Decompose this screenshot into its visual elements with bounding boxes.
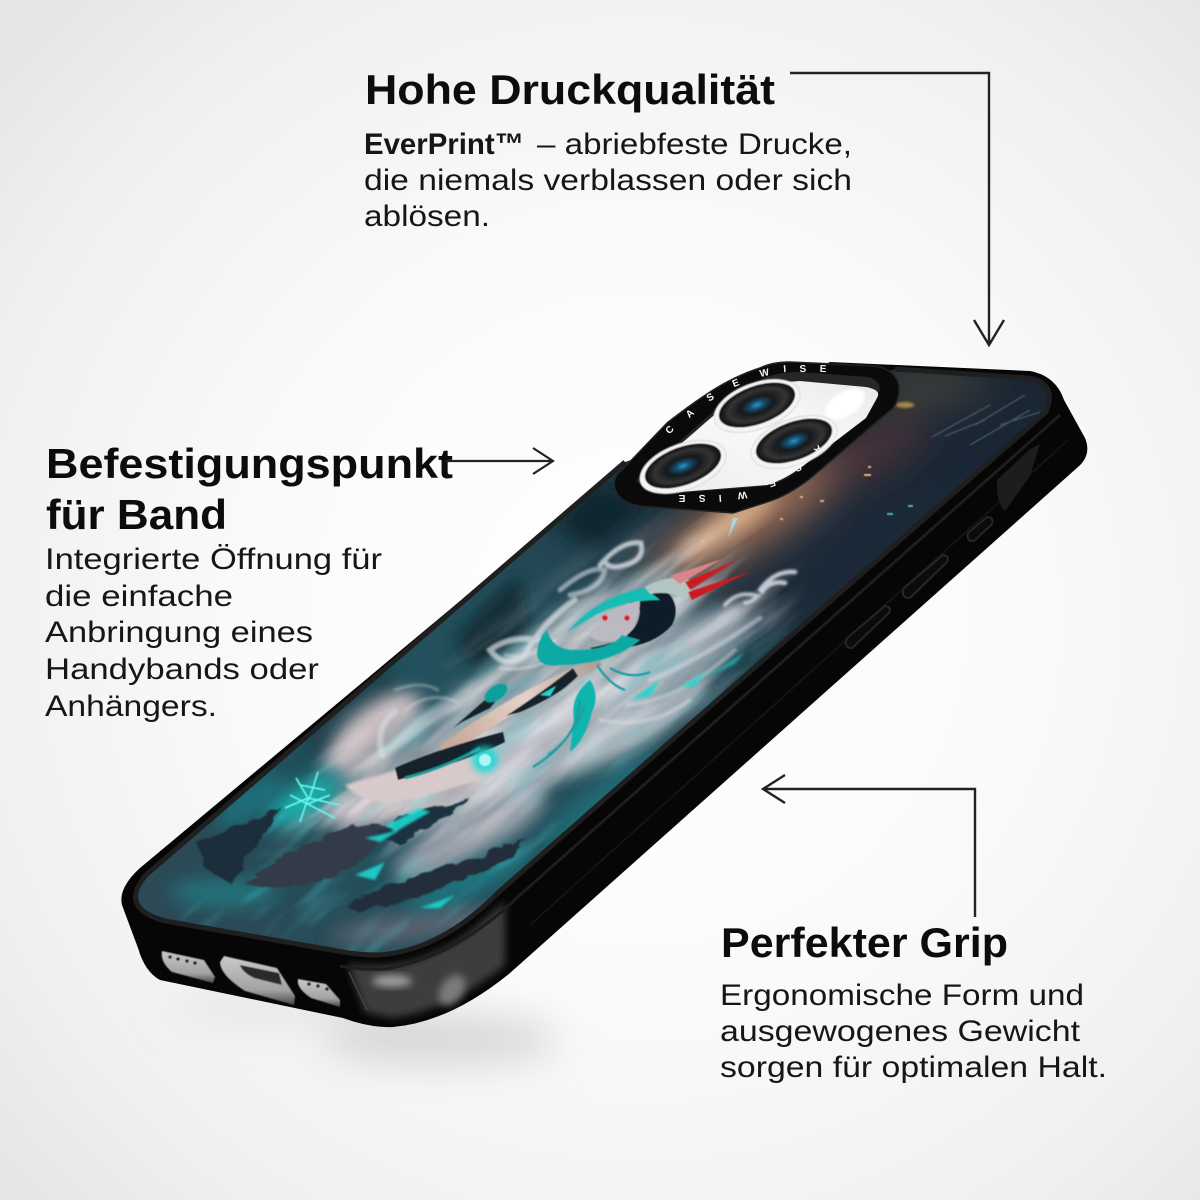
teal wisp texture — [181, 604, 724, 952]
port: charging — [220, 956, 295, 1005]
dark clouds upper left — [300, 485, 650, 765]
brand text: A — [684, 408, 697, 421]
eyes — [602, 615, 608, 621]
camera inner wall — [636, 372, 880, 493]
face — [590, 600, 640, 642]
phone shadow — [170, 992, 560, 1064]
lens right — [744, 405, 844, 479]
figure — [345, 559, 752, 802]
heading — [46, 440, 453, 538]
body text: Handybands oder — [45, 653, 319, 686]
body text: ablösen. — [364, 200, 490, 233]
arrow: grip — [763, 775, 975, 917]
wisp texture — [276, 518, 800, 864]
callout: strap attachment — [45, 440, 453, 723]
body text: Anhängers. — [45, 690, 217, 723]
brand text: C — [833, 425, 846, 438]
heading: Perfekter Grip — [721, 919, 1008, 966]
heading: Hohe Druckqualität — [365, 66, 775, 113]
brand text: W — [736, 488, 748, 501]
body text — [45, 543, 382, 723]
brand text: S — [698, 492, 706, 503]
lower teal streaks — [355, 652, 745, 908]
art base — [138, 369, 1047, 952]
crown — [645, 578, 695, 600]
brand text: A — [811, 442, 824, 455]
brand text: S — [791, 461, 803, 474]
white swirls — [380, 543, 795, 755]
braid — [570, 680, 596, 752]
body text: – abriebfeste Drucke, — [537, 128, 852, 161]
lower dark shapes — [197, 798, 525, 913]
body text — [364, 128, 852, 233]
brand text: C — [664, 424, 677, 437]
star sparks — [702, 466, 913, 542]
brand text: E — [678, 492, 685, 503]
nebula core — [672, 497, 783, 568]
glow orb — [472, 747, 498, 773]
heading: Befestigungspunkt — [46, 440, 453, 487]
port: right speaker — [298, 979, 340, 1007]
volume up button — [903, 555, 948, 598]
body text: die niemals verblassen oder sich — [364, 164, 852, 197]
pink body band — [345, 752, 500, 802]
callout: print quality — [364, 66, 852, 233]
arm — [440, 660, 602, 751]
lens left — [633, 430, 733, 504]
camera module — [614, 362, 899, 513]
camera glass — [640, 381, 878, 493]
body text: ausgewogenes Gewicht — [720, 1015, 1081, 1048]
body text: EverPrint™ — [364, 128, 524, 161]
brand text: E — [767, 476, 777, 489]
brand text: E — [731, 377, 742, 390]
brand text: W — [759, 367, 771, 380]
hair dark mass — [590, 590, 676, 652]
heading: für Band — [46, 491, 227, 538]
arrow: print quality — [790, 73, 1004, 345]
lens top — [707, 369, 807, 443]
strap slot — [997, 444, 1040, 511]
large soft cloud masses — [313, 535, 773, 951]
callout: grip — [720, 919, 1107, 1084]
teal haze — [170, 618, 793, 919]
glossy bottom corner — [348, 902, 505, 1018]
arrow: strap attachment — [445, 448, 553, 474]
flash — [820, 383, 870, 425]
brand text: S — [705, 391, 717, 404]
leg band — [395, 732, 505, 780]
brand text — [664, 364, 846, 503]
armour — [506, 668, 578, 716]
side ridge — [340, 415, 1060, 969]
body text — [720, 979, 1107, 1084]
gold spark — [896, 402, 914, 408]
body text: sorgen für optimalen Halt. — [720, 1051, 1107, 1084]
volume down button — [846, 606, 890, 648]
teal hair — [567, 588, 660, 632]
case body — [121, 362, 1087, 1027]
shoulder gem — [484, 683, 508, 704]
red feathers — [670, 559, 752, 600]
nebula glow — [632, 373, 990, 606]
brand text: I — [718, 492, 722, 503]
glowing hand — [285, 772, 340, 822]
port: left speaker — [162, 951, 215, 983]
brand text: I — [783, 364, 787, 375]
sky streaks — [932, 395, 1040, 445]
screen rim — [136, 369, 1049, 955]
body text: die einfache — [45, 580, 233, 613]
body text: Integrierte Öffnung für — [45, 543, 382, 576]
brand text: E — [820, 364, 827, 375]
body text: Ergonomische Form und — [720, 979, 1084, 1012]
phone case — [121, 361, 1088, 1028]
body text: Anbringung eines — [45, 616, 313, 649]
silent switch — [968, 517, 992, 541]
camera ring — [614, 362, 899, 513]
brand text: S — [799, 364, 807, 375]
printed artwork — [138, 369, 1047, 952]
